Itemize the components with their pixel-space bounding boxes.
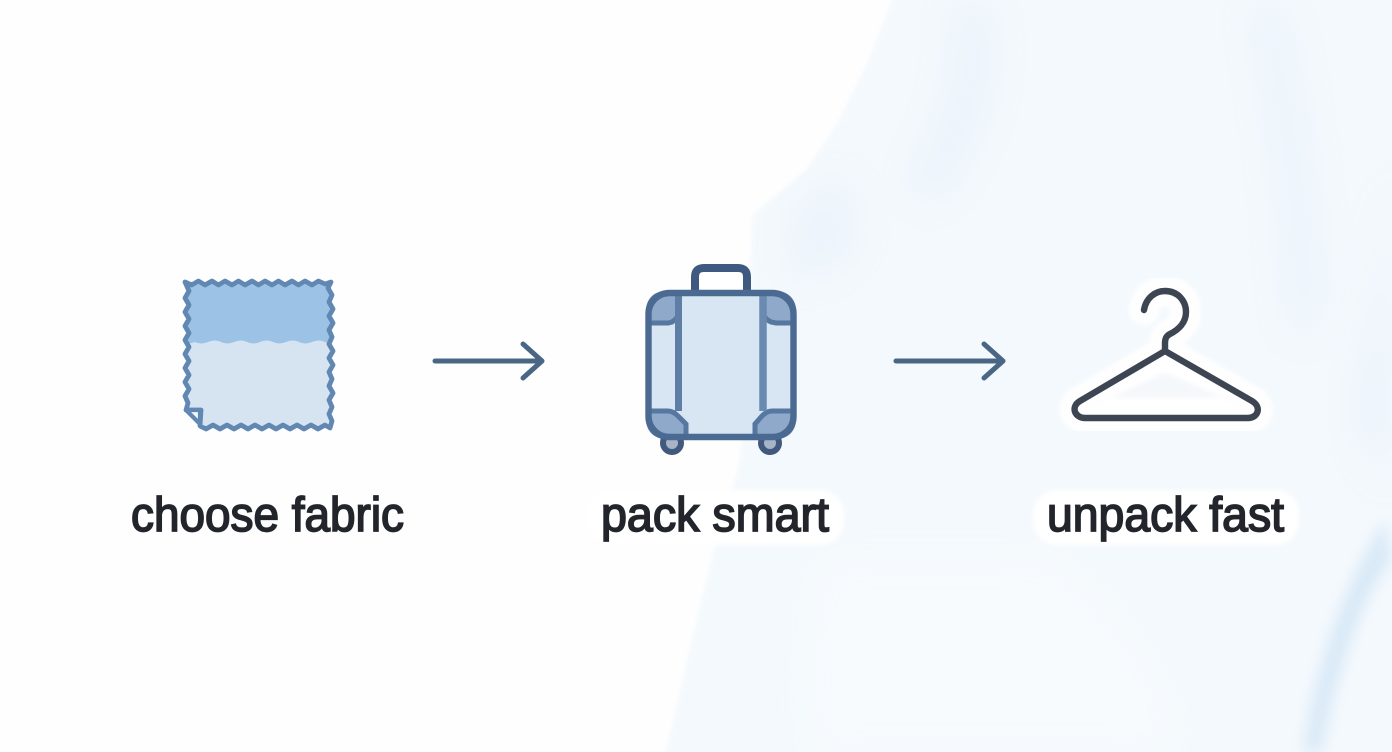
background: fabric cloth panel: [668, 0, 1392, 752]
arrow: suitcase to hanger: [896, 344, 1003, 378]
icon: fabric swatch: [180, 276, 338, 429]
arrow: fabric to suitcase: [435, 344, 542, 378]
icon: hanger: [1075, 291, 1258, 418]
label: choose fabric: choose fabric: [131, 489, 404, 542]
icon: suitcase: [648, 268, 794, 452]
label: unpack fast: unpack fast: [1047, 489, 1284, 542]
label: pack smart: pack smart: [601, 489, 829, 542]
